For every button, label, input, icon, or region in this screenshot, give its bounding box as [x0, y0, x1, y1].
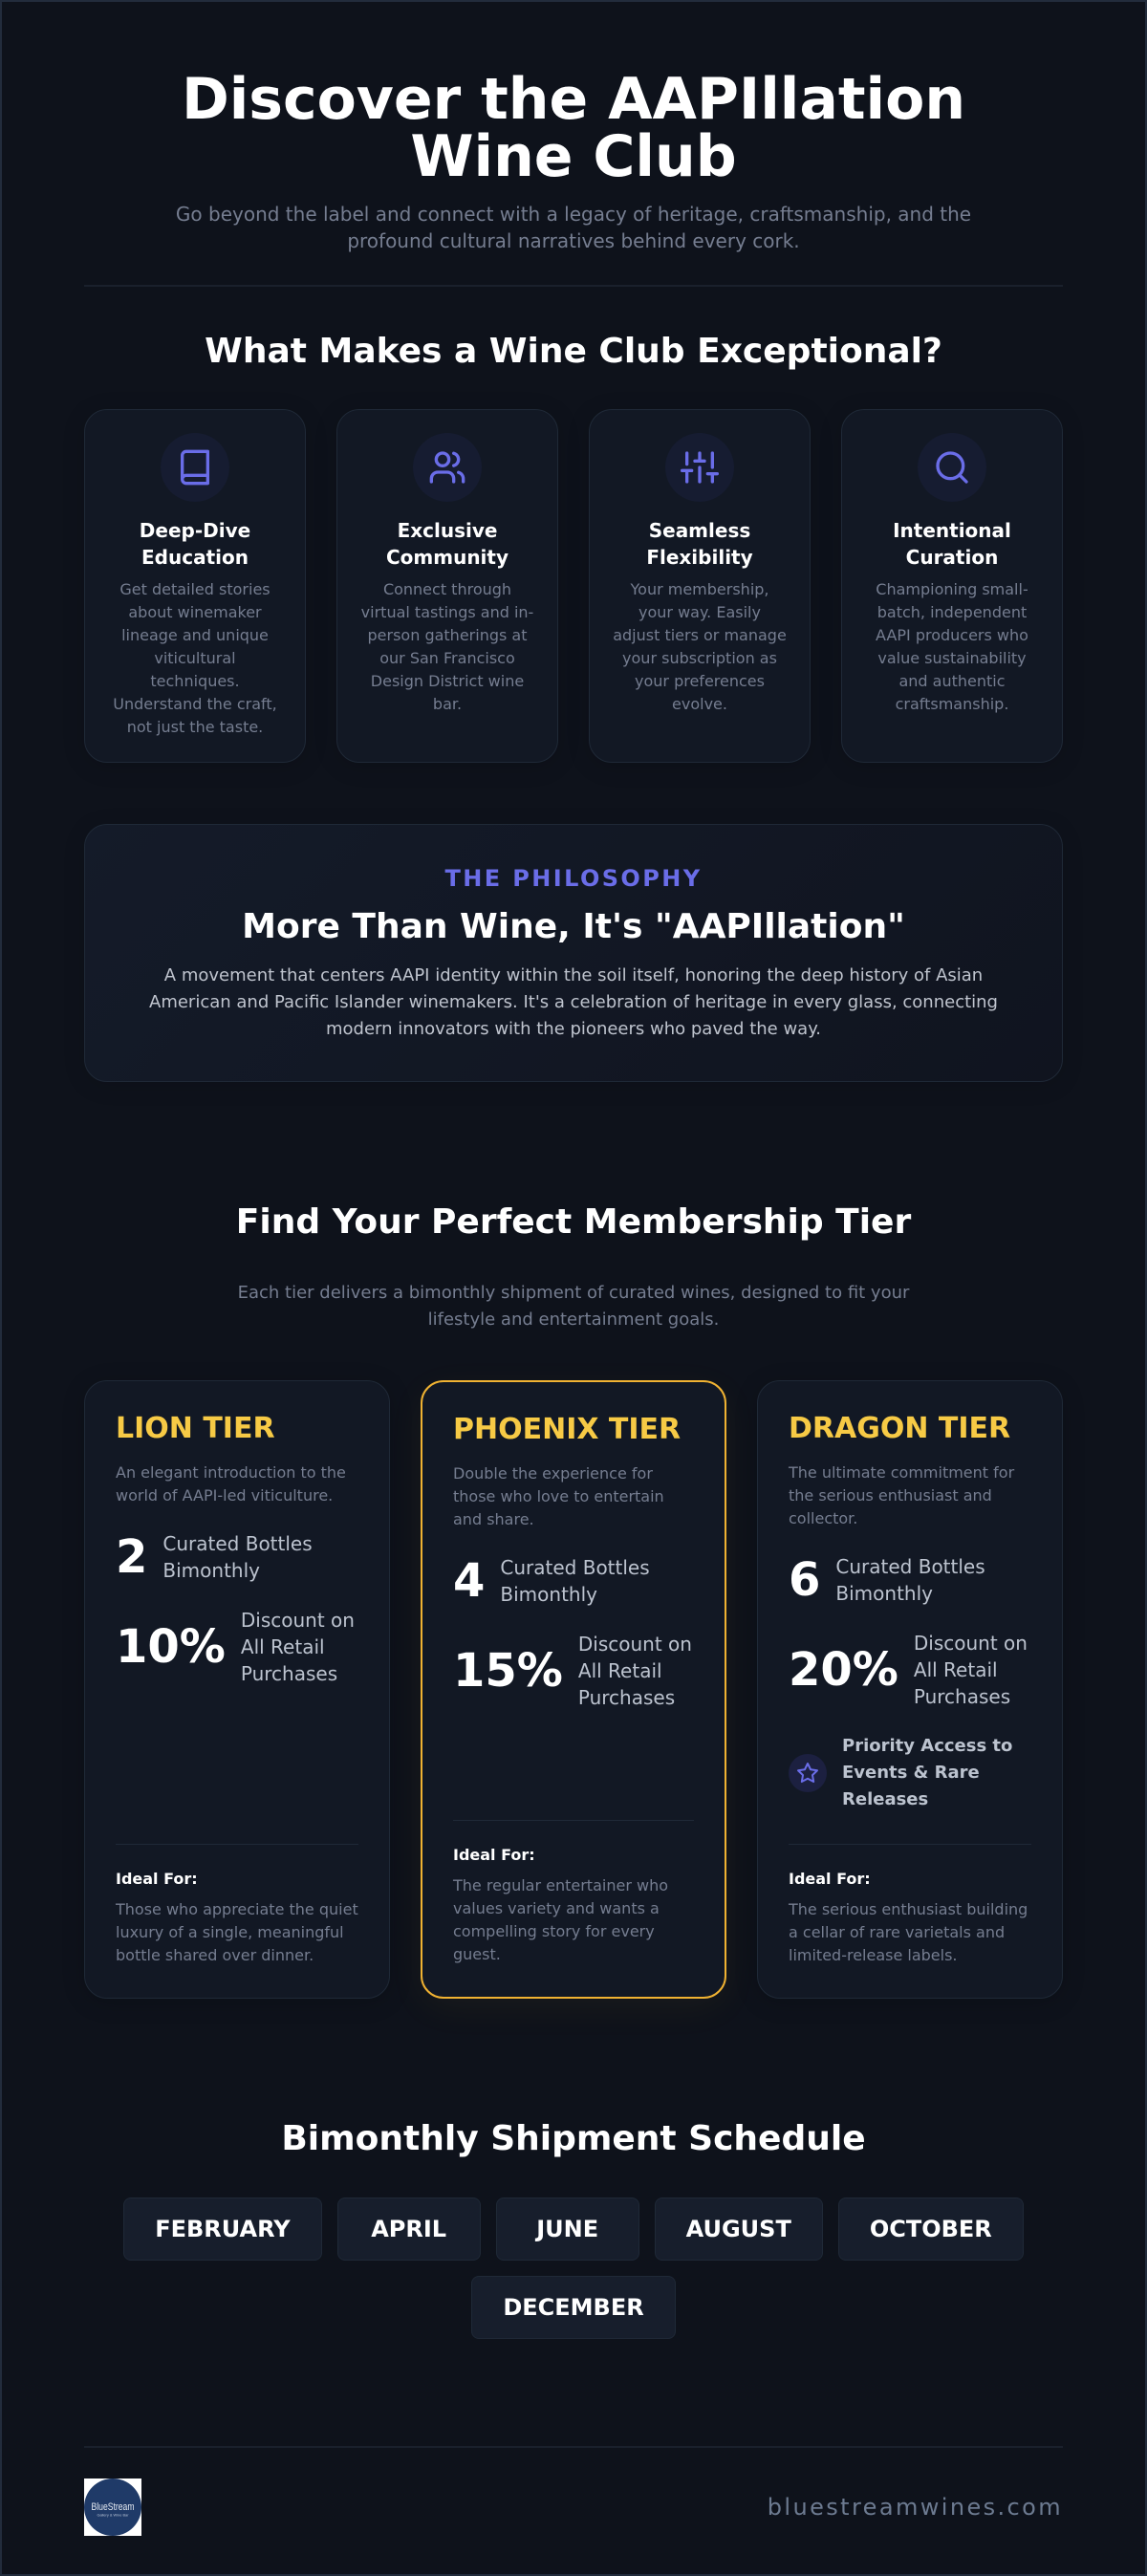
stat: discount: Discount on All Retail Purchases — [241, 1609, 355, 1685]
ideal for: The regular entertainer who values variety and wants a compelling story for every guest. — [453, 1876, 668, 1963]
tier name: DRAGON TIER — [789, 1412, 1010, 1445]
tier description: Double the experience for those who love to entertain and share. — [453, 1464, 664, 1528]
month — [496, 2197, 639, 2261]
stat: discount: 10% — [116, 1620, 226, 1674]
month: DECEMBER — [503, 2294, 644, 2321]
subtitle: Go beyond the label and connect with a legacy of heritage, craftsmanship, and the profound cultural narratives behind every cork. — [176, 203, 971, 252]
stat: discount — [789, 1632, 1028, 1708]
priority access perk: Priority Access to Events & Rare Releases — [842, 1736, 1012, 1809]
eyebrow label: THE PHILOSOPHY — [445, 865, 702, 892]
title: Wine Club — [410, 123, 737, 190]
month: AUGUST — [686, 2216, 791, 2242]
heading: shipment schedule: Bimonthly Shipment Schedule — [281, 2119, 866, 2158]
card text: Championing small-batch, independent AAPI producers who value sustainability and authentic craftsmanship. — [876, 580, 1028, 713]
card: phoenix tier (highlighted) — [421, 1380, 726, 1999]
ideal for: Ideal For: — [453, 1846, 535, 1864]
logo: BlueStream — [84, 2479, 141, 2536]
card: dragon tier — [757, 1380, 1063, 1999]
stat: bottles: 2 — [116, 1530, 147, 1584]
card text: Get detailed stories about winemaker lineage and unique viticultural techniques. Understand the craft, not just the taste. — [113, 580, 277, 736]
philosophy text: A movement that centers AAPI identity within the soil itself, honoring the deep history of Asian American and Pacific Islander winemakers. It's a celebration of heritage in every glass, connecting modern innovators with the pioneers who paved the way. — [149, 965, 998, 1039]
tier description: An elegant introduction to the world of AAPI-led viticulture. — [116, 1463, 346, 1504]
card text: Your membership, your way. Easily adjust tiers or manage your subscription as your preferences evolve. — [613, 580, 787, 713]
tier name: PHOENIX TIER — [453, 1413, 681, 1446]
heading: what makes a wine club exceptional: What Makes a Wine Club Exceptional? — [205, 332, 942, 371]
card heading: Deep-Dive Education — [140, 519, 250, 569]
stat: bottles: Curated Bottles Bimonthly — [500, 1556, 650, 1606]
stat: bottles: Curated Bottles Bimonthly — [835, 1555, 985, 1605]
panel: philosophy — [84, 824, 1063, 1082]
card heading: Exclusive Community — [386, 519, 509, 569]
stat: discount: Discount on All Retail Purchases — [578, 1633, 692, 1709]
ideal for: Those who appreciate the quiet luxury of a single, meaningful bottle shared over dinner. — [116, 1900, 358, 1964]
philosophy heading: More Than Wine, It's "AAPIllation" — [242, 907, 905, 946]
stat: bottles: 6 — [789, 1553, 820, 1607]
tier name: LION TIER — [116, 1412, 275, 1445]
card heading: Intentional Curation — [893, 519, 1011, 569]
card: intentional curation — [841, 409, 1063, 763]
card: lion tier — [84, 1380, 390, 1999]
stat: bottles: Curated Bottles Bimonthly — [162, 1532, 313, 1582]
icon: users — [413, 433, 482, 502]
month: FEBRUARY — [155, 2216, 291, 2242]
stat: discount: Discount on All Retail Purchases — [914, 1632, 1028, 1708]
stat: discount: 15% — [453, 1644, 563, 1698]
logo: BlueStream: Gallery & Wine Bar — [97, 2514, 129, 2518]
ideal for: The serious enthusiast building a cellar of rare varietals and limited-release labels. — [789, 1900, 1028, 1964]
month — [337, 2197, 481, 2261]
ideal for: Ideal For: — [789, 1870, 871, 1888]
month — [123, 2197, 322, 2261]
panel: shipment months — [123, 2197, 1024, 2339]
heading: membership tiers: Find Your Perfect Membership Tier — [236, 1202, 911, 1242]
month — [655, 2197, 823, 2261]
month — [838, 2197, 1024, 2261]
month — [471, 2276, 676, 2339]
stat: bottles: 4 — [453, 1554, 485, 1608]
icon: search — [918, 433, 986, 502]
month: OCTOBER — [870, 2216, 992, 2242]
ideal for — [116, 1844, 358, 1967]
icon: sliders — [665, 433, 734, 502]
panel: membership tiers — [84, 1380, 1063, 1999]
card: seamless flexibility — [589, 409, 811, 763]
icon: book — [161, 433, 229, 502]
card text: Connect through virtual tastings and in-person gatherings at our San Francisco Design District wine bar. — [361, 580, 533, 713]
month: JUNE — [536, 2216, 598, 2242]
month: APRIL — [371, 2216, 446, 2242]
card: deep-dive education — [84, 409, 306, 763]
panel: feature cards — [84, 409, 1063, 763]
tier description: The ultimate commitment for the serious enthusiast and collector. — [789, 1463, 1014, 1527]
stat: discount — [116, 1609, 355, 1685]
tiers intro text: Each tier delivers a bimonthly shipment of curated wines, designed to fit your lifestyle and entertainment goals. — [238, 1283, 909, 1330]
card heading: Seamless Flexibility — [646, 519, 753, 569]
footer website: bluestreamwines.com — [768, 2494, 1063, 2521]
ideal for — [453, 1820, 694, 1966]
stat: discount — [453, 1633, 692, 1709]
ideal for: Ideal For: — [116, 1870, 198, 1888]
stat: discount: 20% — [789, 1643, 898, 1697]
title — [182, 66, 965, 190]
title: Discover the AAPIllation — [182, 66, 965, 133]
card: exclusive community — [336, 409, 558, 763]
ideal for — [789, 1844, 1031, 1967]
